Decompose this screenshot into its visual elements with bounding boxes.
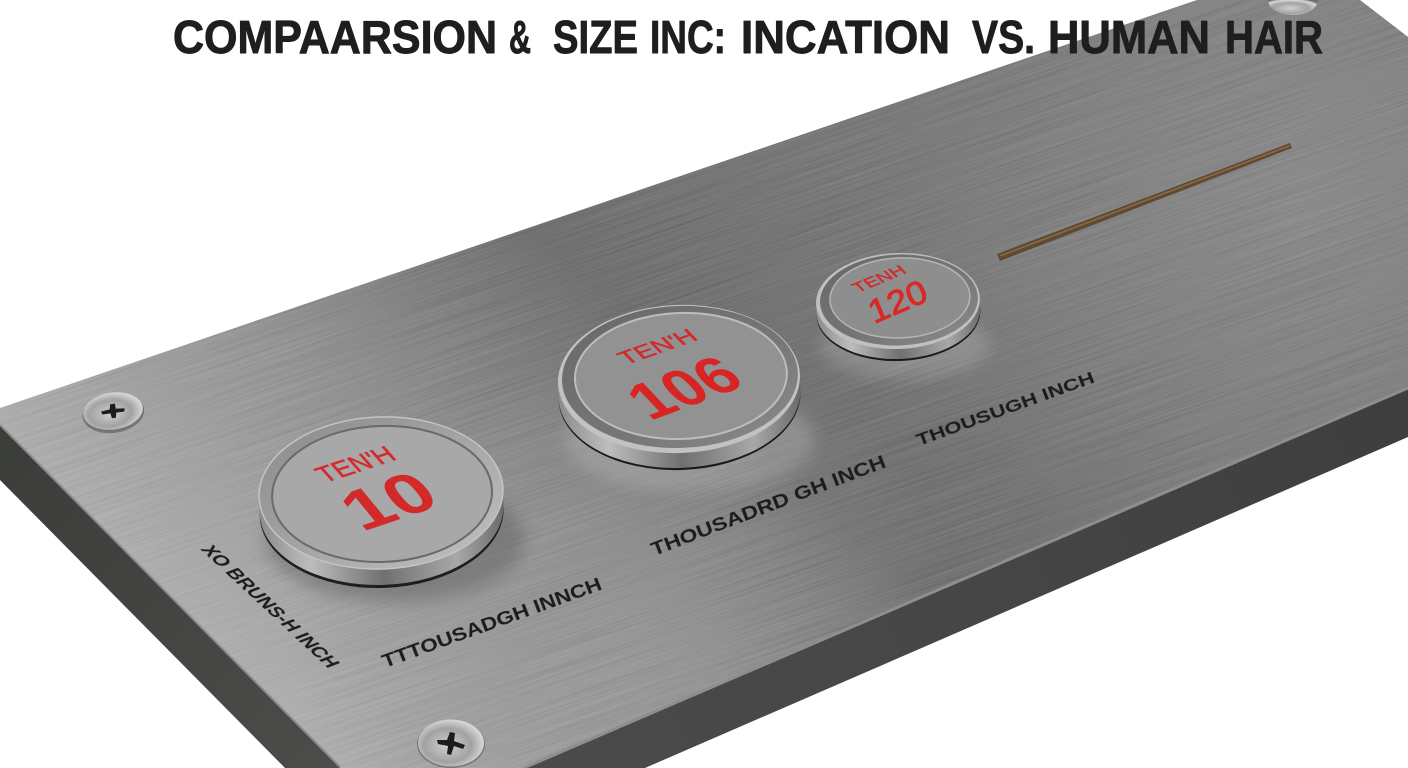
label: coin 106 engraving: THOUSADRD GH INCH <box>648 451 889 560</box>
coin body <box>814 250 982 364</box>
coin glow <box>820 311 990 379</box>
icon: screw top right <box>1268 0 1318 15</box>
plate front side face <box>524 387 1408 768</box>
title: HAIR <box>1225 11 1323 63</box>
plate left side face <box>0 425 340 768</box>
title: & <box>509 11 531 63</box>
title: SIZE <box>553 11 638 63</box>
icon: human hair strand <box>997 143 1292 261</box>
title: INC: <box>650 11 726 63</box>
label: coin 10 engraving: TTTOUSADGH INNCH <box>379 574 605 672</box>
coin label: TEN'H: TEN'H <box>612 325 703 369</box>
coin body <box>555 301 803 474</box>
coin label: TENH: TENH <box>849 263 910 296</box>
title: INCATION <box>741 11 950 63</box>
coin label: TEN'H: TEN'H <box>310 442 402 488</box>
icon: screw bottom <box>417 720 485 768</box>
coin shadow <box>265 478 525 602</box>
title: HUMAN <box>1048 11 1210 63</box>
coin: 106 <box>555 301 815 492</box>
title: COMPAARSION <box>173 11 497 63</box>
coin value: 120: 120 <box>863 273 933 331</box>
coin body <box>256 413 506 592</box>
coin value: 106: 106 <box>613 345 757 431</box>
coin: 10 <box>256 413 525 602</box>
label: left edge engraving: XO BRUNS-H INCH <box>195 543 344 670</box>
label: coin 120 engraving: THOUSUGH INCH <box>914 368 1097 450</box>
title: VS. <box>972 11 1035 63</box>
coin: 120 <box>814 250 990 379</box>
coin glow <box>565 388 815 492</box>
coin value: 10: 10 <box>326 460 452 543</box>
icon: screw left <box>80 388 147 437</box>
